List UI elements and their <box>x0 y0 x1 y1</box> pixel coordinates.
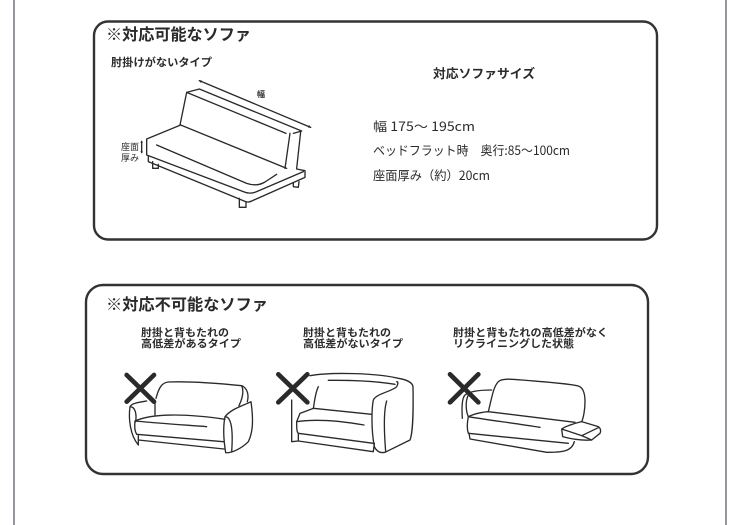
caption: reclined state: 肘掛と背もたれの高低差がなく <box>453 326 608 339</box>
caption: type with height difference: 肘掛と背もたれの <box>141 326 229 339</box>
caption: type with height difference: 高低差があるタイプ <box>141 337 242 350</box>
heading: compatible sofas: ※対応可能なソファ <box>106 25 251 44</box>
icon: cross mark <box>450 374 478 402</box>
heading: incompatible sofas: ※対応不可能なソファ <box>106 295 268 314</box>
icon: cross mark <box>127 375 154 402</box>
illustration: armless sofa <box>140 80 311 207</box>
caption: reclined state: リクライニングした状態 <box>453 337 575 350</box>
size: seat thickness: 座面厚み（約）20cm <box>373 165 490 184</box>
panel: compatible sofas <box>94 22 657 240</box>
caption: type without height difference: 高低差がないタイプ <box>303 337 404 350</box>
illustration: sofa with raised arms <box>127 375 253 453</box>
label: seat thickness: 座面 <box>121 142 139 152</box>
label: no armrest type: 肘掛けがないタイプ <box>111 55 212 69</box>
caption: type without height difference: 肘掛と背もたれの <box>303 326 391 339</box>
panel: incompatible sofas <box>86 285 648 474</box>
heading: compatible sofa sizes: 対応ソファサイズ <box>433 66 535 81</box>
size: depth when flat: ベッドフラット時 奥行:85～100cm <box>373 140 570 159</box>
label: seat thickness: 厚み <box>121 153 139 163</box>
illustration: reclined sofa <box>450 374 601 452</box>
label: width: 幅 <box>257 89 265 99</box>
illustration: sofa with level arms <box>278 373 413 453</box>
size: width: 幅 175～ 195cm <box>373 116 475 135</box>
icon: cross mark <box>278 374 307 402</box>
